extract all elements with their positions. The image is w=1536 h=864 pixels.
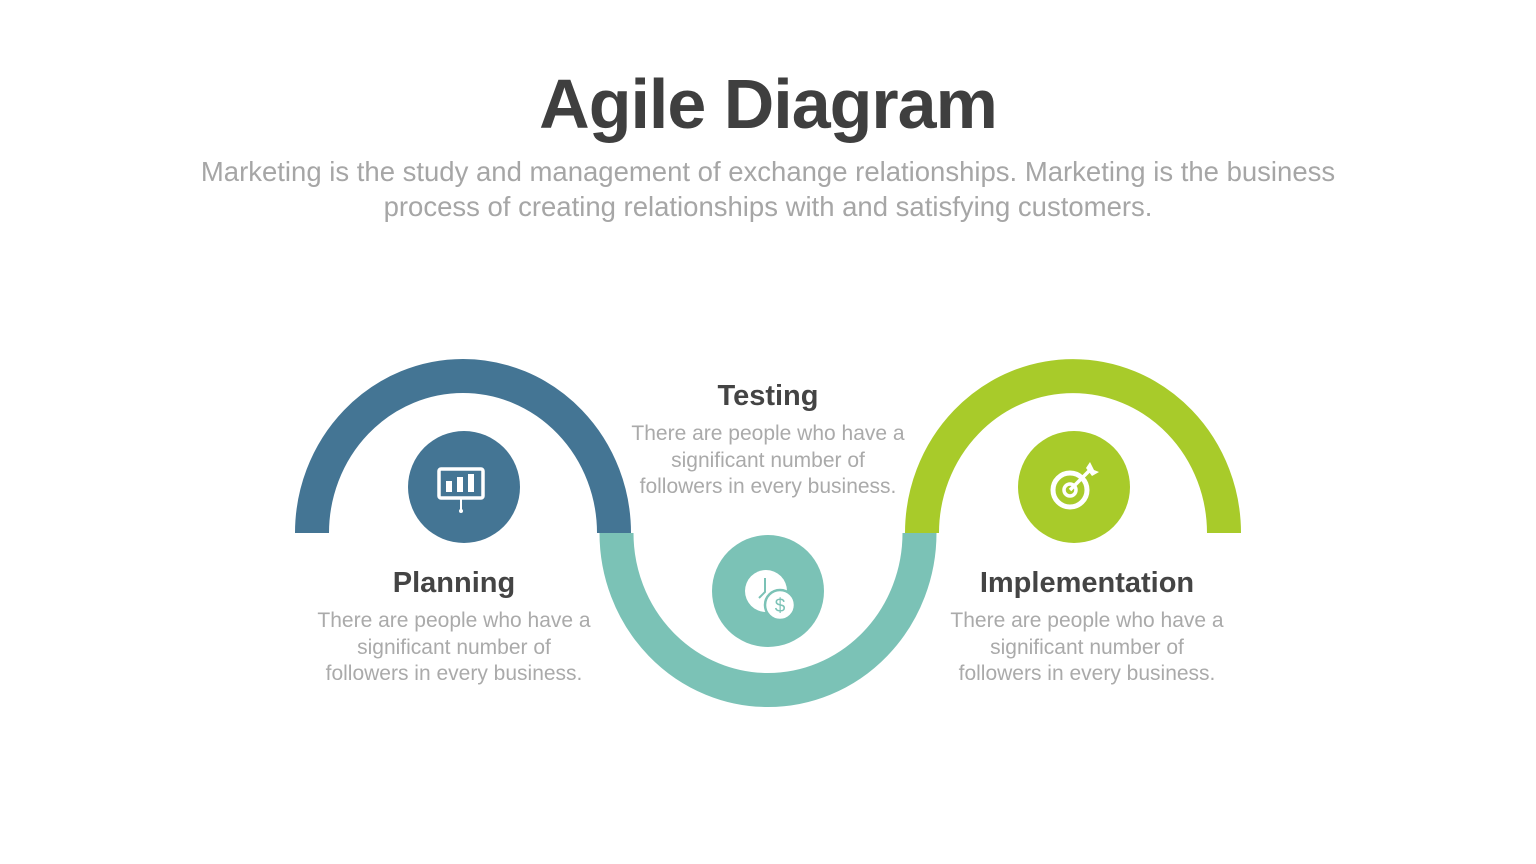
text: implementation: significant number of [990, 636, 1184, 659]
text: testing: There are people who have a [631, 422, 905, 445]
arc: planning (blue) [312, 376, 614, 533]
text: planning [317, 567, 591, 685]
title: Agile Diagram [539, 65, 997, 143]
text: testing: Testing [718, 380, 818, 412]
subtitle [201, 156, 1335, 222]
text: testing: followers in every business. [640, 475, 896, 498]
text: testing [631, 380, 905, 498]
text: implementation: Implementation [980, 567, 1194, 599]
text: implementation: There are people who have a [950, 609, 1224, 632]
text: implementation [950, 567, 1224, 685]
text: testing: significant number of [671, 449, 865, 472]
icon: testing clock dollar [712, 535, 824, 647]
subtitle: Marketing is the study and management of exchange relationships. Marketing is the business [201, 156, 1335, 187]
subtitle: process of creating relationships with and satisfying customers. [384, 191, 1152, 222]
text: implementation: followers in every business. [959, 662, 1215, 685]
text: planning: followers in every business. [326, 662, 582, 685]
text: planning: There are people who have a [317, 609, 591, 632]
text: planning: Planning [393, 567, 515, 599]
icon: implementation target [1018, 431, 1130, 543]
icon: testing clock dollar: $ [775, 596, 786, 617]
arc: testing (teal) [616, 533, 920, 690]
text: planning: significant number of [357, 636, 551, 659]
arc: implementation (green) [922, 376, 1224, 533]
icon: planning chart [408, 431, 520, 543]
